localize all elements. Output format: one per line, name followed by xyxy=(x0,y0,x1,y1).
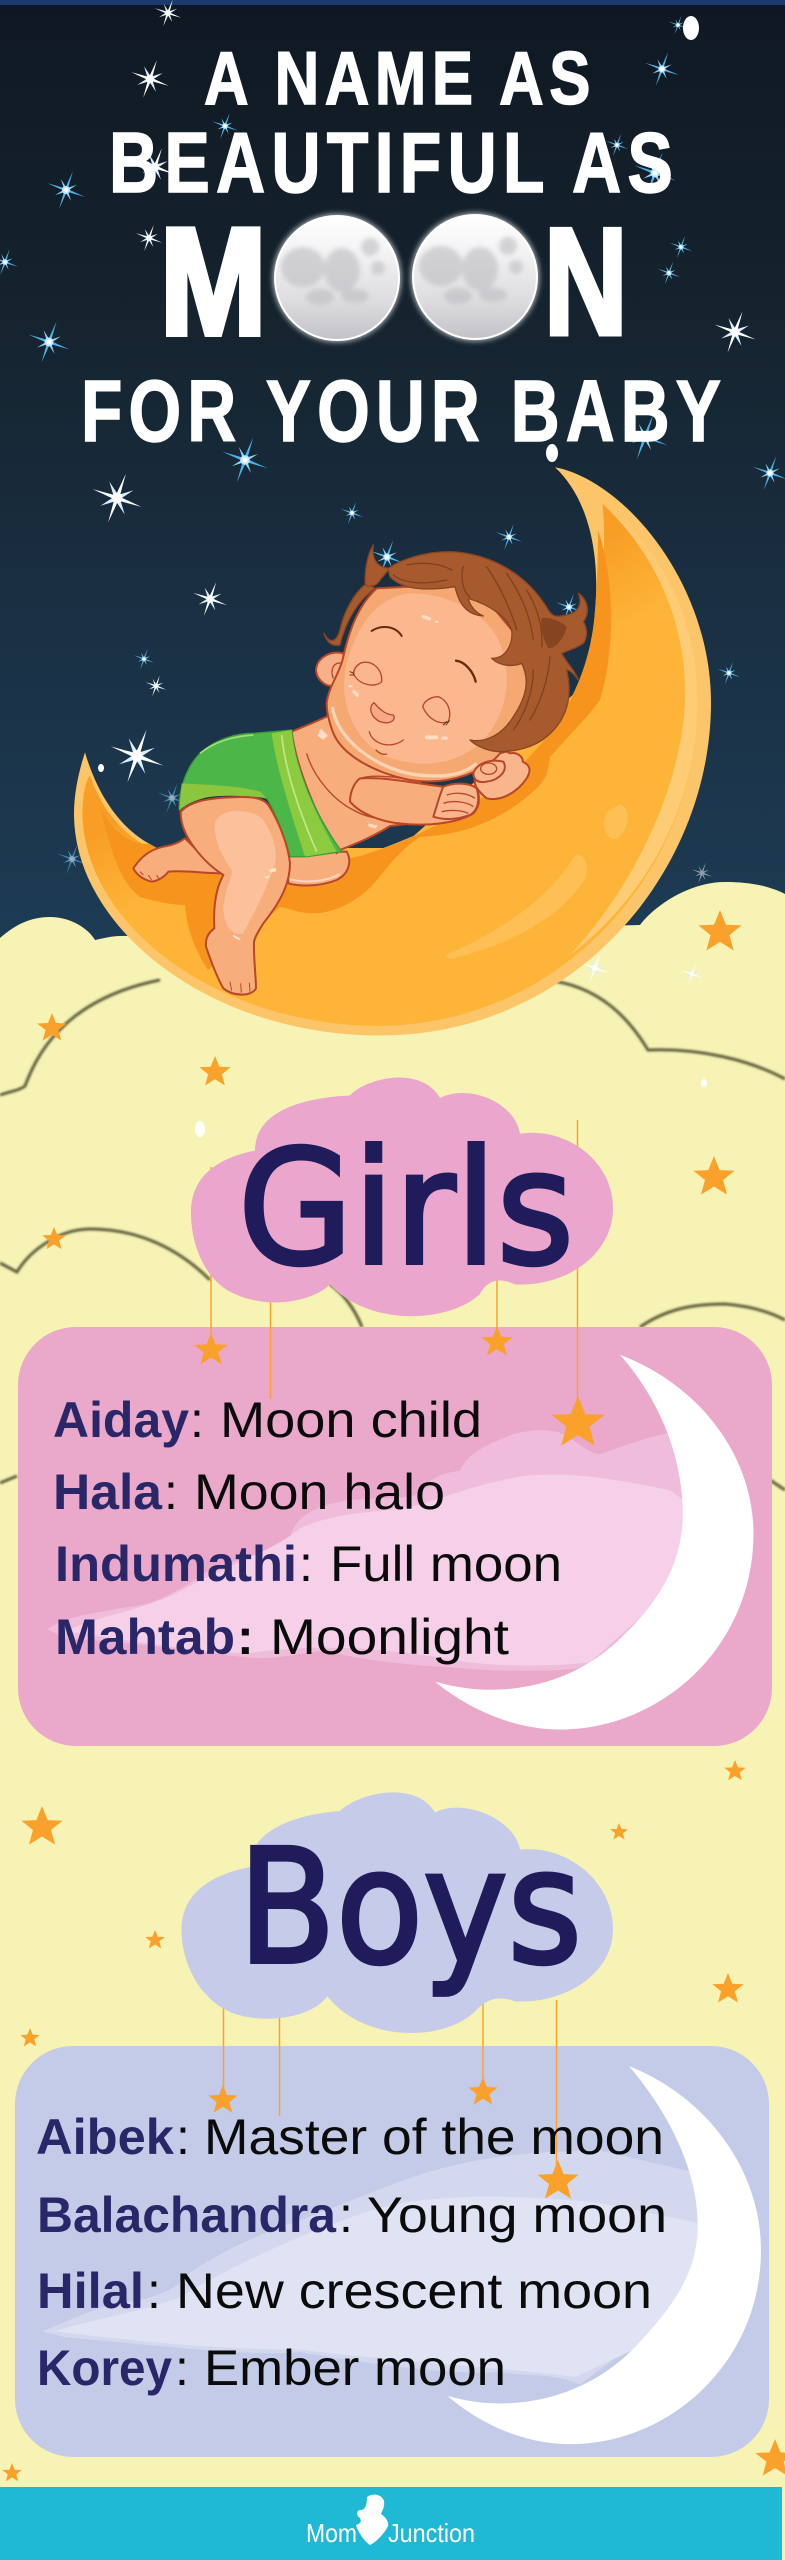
heading: Boys: Boys xyxy=(238,1816,582,2000)
list: girl names: : xyxy=(164,1464,178,1520)
lower fingers xyxy=(433,784,478,819)
list: girl names: : xyxy=(299,1536,313,1592)
moon shadow xyxy=(100,530,611,970)
panel clouds xyxy=(42,2151,705,2384)
list: boy names: : xyxy=(175,2340,189,2396)
list: girl names: Moon halo xyxy=(194,1464,445,1520)
panel clouds xyxy=(48,1430,700,1671)
diaper xyxy=(179,730,342,857)
front leg xyxy=(181,797,290,995)
heading cloud: boys xyxy=(182,1792,613,2033)
decorative yellow stars: lower xyxy=(2,1806,785,2481)
starfield xyxy=(0,0,785,887)
strings and stars: boys xyxy=(208,2000,579,2199)
panel: boys xyxy=(15,2046,769,2457)
face xyxy=(327,583,567,782)
list: boy names: Balachandra xyxy=(37,2187,337,2243)
upper hand xyxy=(475,751,530,799)
list: boy names: New crescent moon xyxy=(176,2263,652,2319)
decorative yellow stars: upper xyxy=(37,910,746,1780)
list: girl names xyxy=(53,1392,562,1665)
title: N xyxy=(544,197,638,367)
icon: moon right xyxy=(411,213,539,341)
icon: moon left xyxy=(273,214,401,342)
icon: mother and child heart xyxy=(356,2495,388,2545)
moon rim xyxy=(74,467,711,1036)
cloud layer outlines xyxy=(0,980,785,1490)
title: M xyxy=(160,197,278,367)
list: girl names: Moon child xyxy=(220,1392,482,1448)
title xyxy=(81,36,727,460)
list: boy names: Young moon xyxy=(367,2187,667,2243)
hair xyxy=(324,545,587,752)
list: girl names: Moonlight xyxy=(270,1609,509,1665)
logo: MomJunction: Junction xyxy=(388,2518,475,2548)
panel: girls xyxy=(18,1327,772,1746)
list: girl names: : xyxy=(237,1609,254,1665)
list: boy names: : xyxy=(176,2109,190,2165)
torso xyxy=(292,713,422,853)
panel crescent xyxy=(435,1355,754,1729)
heading cloud: girls xyxy=(191,1078,613,1316)
upper body and head xyxy=(316,545,587,825)
back thigh xyxy=(287,852,349,886)
moon tip dot xyxy=(546,444,558,462)
icon: sparkles on cloud xyxy=(195,947,707,1137)
list: girl names: Aiday xyxy=(53,1392,189,1448)
logo: MomJunction: Mom xyxy=(306,2518,357,2548)
cream cloud background xyxy=(0,882,785,2560)
crescent moon xyxy=(74,467,711,1036)
list: boy names: : xyxy=(339,2187,353,2243)
night sky background xyxy=(0,0,785,960)
list: boy names xyxy=(36,2109,667,2396)
list: boy names: Ember moon xyxy=(204,2340,506,2396)
hand thumb xyxy=(473,761,505,782)
moon highlight xyxy=(570,504,698,955)
list: boy names: Aibek xyxy=(36,2109,174,2165)
sleeping baby xyxy=(133,545,587,995)
lower body xyxy=(133,713,422,995)
top strip xyxy=(0,0,785,5)
arm xyxy=(350,778,479,825)
list: boy names: Master of the moon xyxy=(204,2109,664,2165)
list: girl names: Mahtab xyxy=(55,1609,235,1665)
footer bar xyxy=(0,2487,782,2560)
list: girl names: Hala xyxy=(53,1464,163,1520)
title: A NAME AS xyxy=(204,36,596,120)
diaper lower trim xyxy=(179,783,267,810)
list: boy names: : xyxy=(147,2263,161,2319)
face features xyxy=(372,627,476,682)
ear xyxy=(316,653,343,686)
back leg xyxy=(133,838,220,881)
list: girl names: Indumathi xyxy=(55,1536,297,1592)
panel crescent xyxy=(448,2066,761,2444)
heading: Girls: Girls xyxy=(238,1117,574,1301)
moon body xyxy=(82,504,698,1026)
list: girl names: Full moon xyxy=(330,1536,562,1592)
list: boy names: Korey xyxy=(37,2340,172,2396)
list: girl names: : xyxy=(190,1392,204,1448)
strings and stars: girls xyxy=(194,1120,604,1446)
logo: MomJunction xyxy=(306,2495,475,2548)
diaper band xyxy=(272,730,337,857)
list: boy names: Hilal xyxy=(37,2263,144,2319)
